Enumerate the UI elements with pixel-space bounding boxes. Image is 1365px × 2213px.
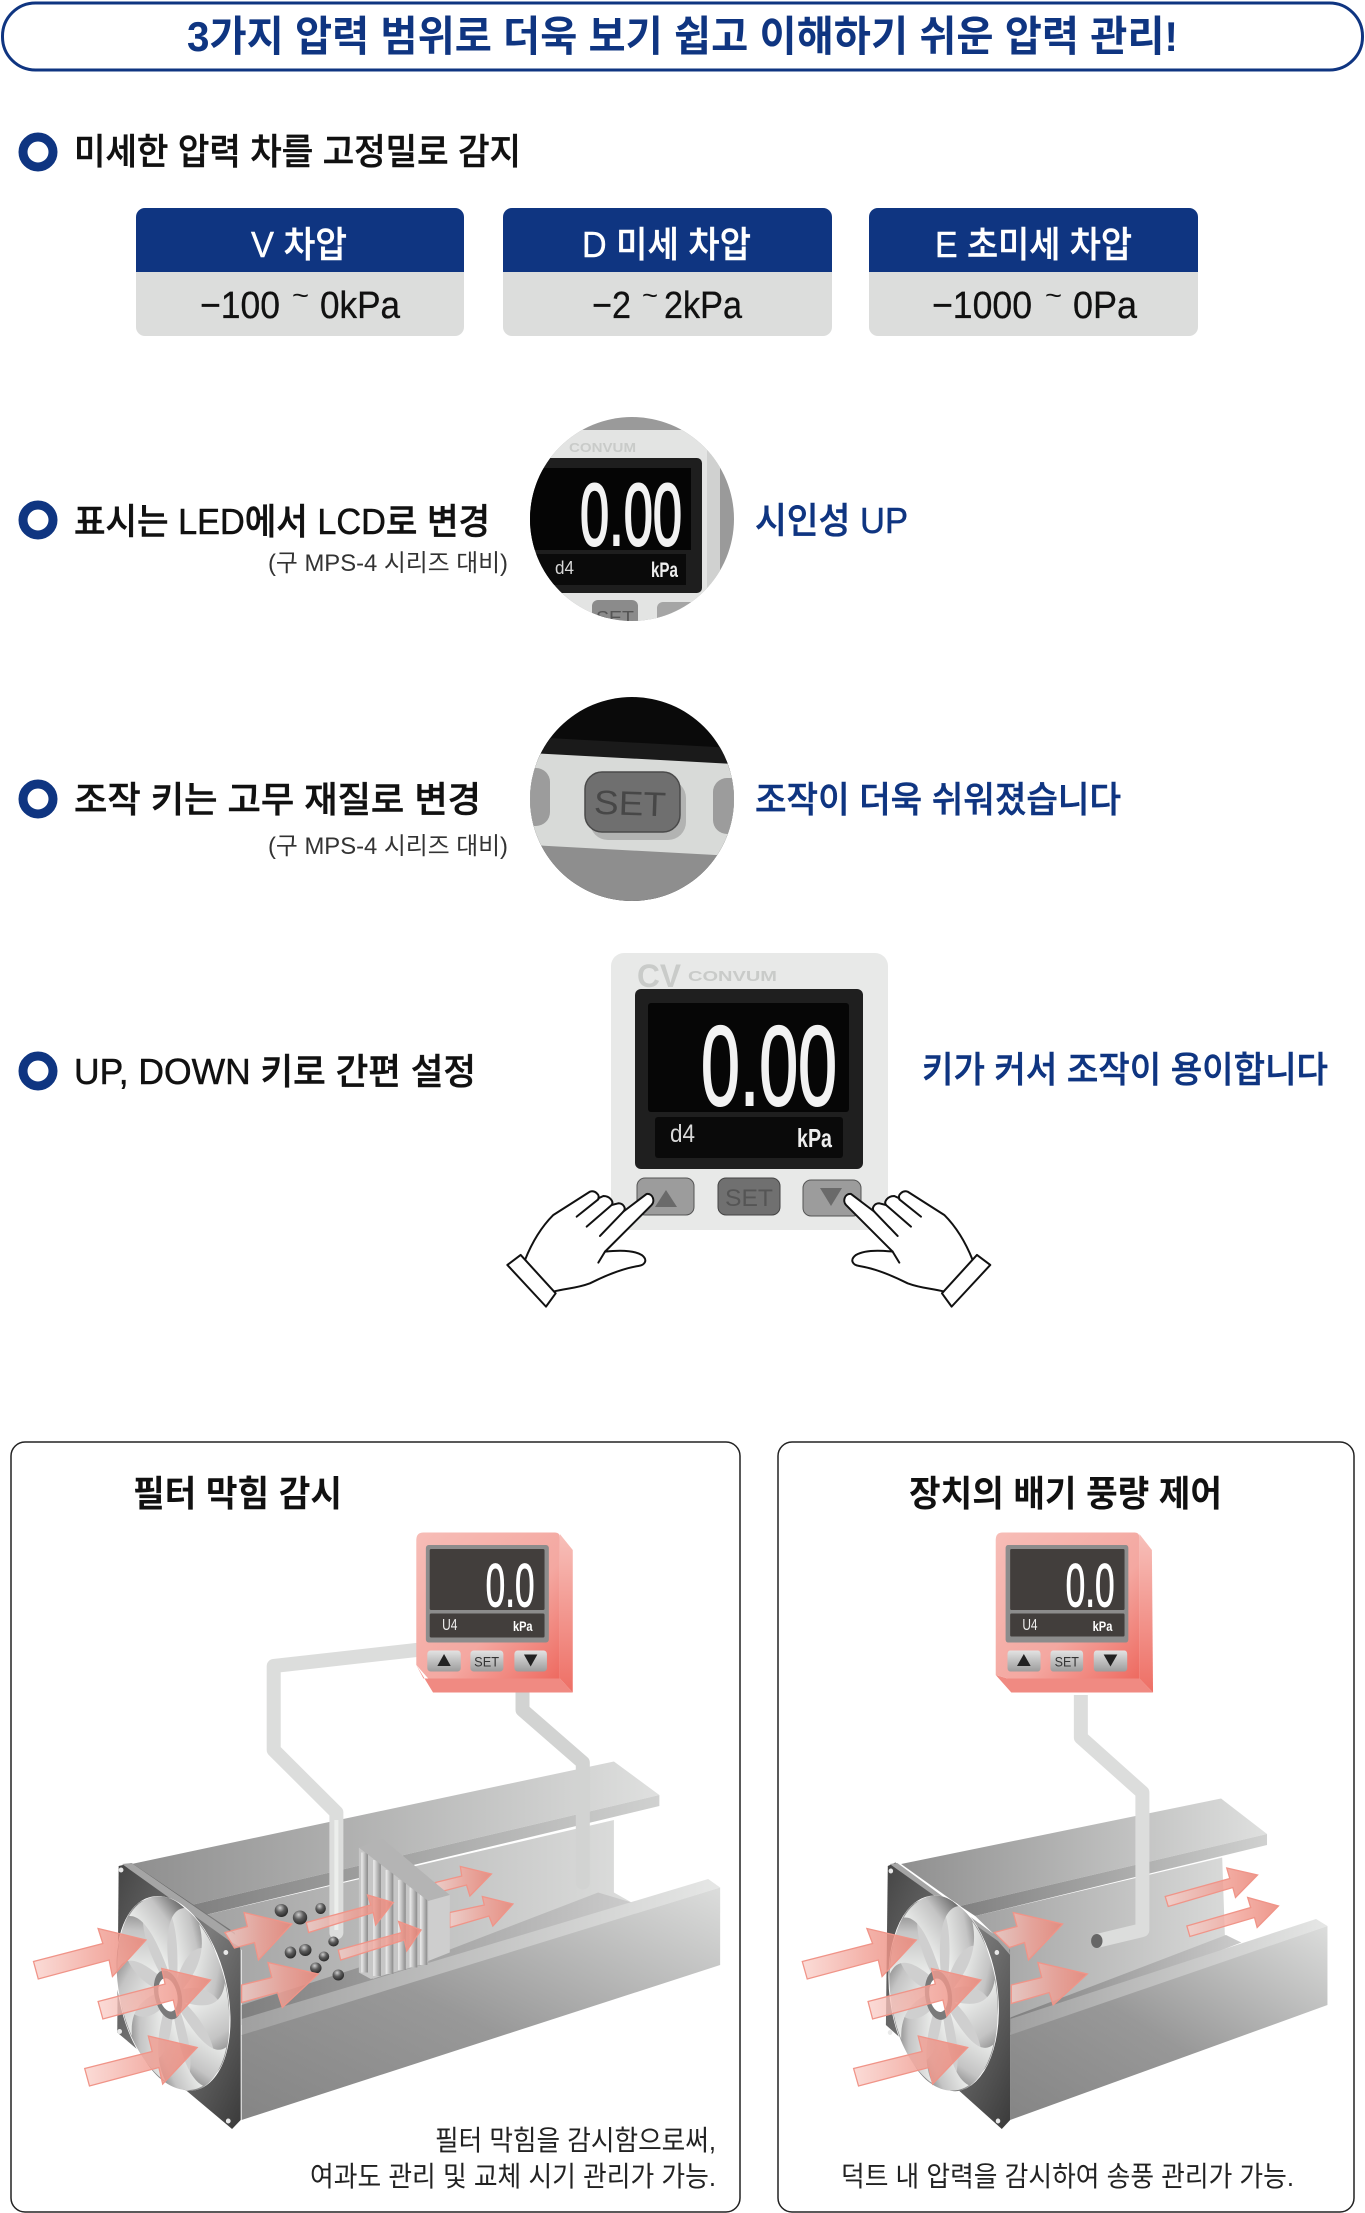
sensor device: SET	[474, 1654, 500, 1670]
display	[635, 989, 863, 1169]
heading: UP, DOWN 키로 간편 설정	[74, 1051, 476, 1092]
card: V 차압: ~	[292, 280, 309, 310]
bullet icon	[23, 784, 53, 814]
heading: 조작 키는 고무 재질로 변경	[74, 779, 481, 820]
card: E 초미세 차압: −1000	[932, 285, 1032, 327]
display: 0.00	[701, 1003, 837, 1129]
photo: LCD close-up	[530, 417, 734, 621]
display: d4	[670, 1120, 695, 1148]
panel caption	[310, 2125, 716, 2192]
sensor device: kPa	[513, 1619, 533, 1634]
card: D 미세 차압: −2	[592, 285, 631, 327]
heading: 미세한 압력 차를 고정밀로 감지	[74, 131, 521, 172]
callout: large keys: 키가 커서 조작이 용이합니다	[922, 1049, 1328, 1090]
sensor device: kPa	[1093, 1619, 1112, 1634]
sensor device	[996, 1532, 1153, 1692]
note: (구 MPS-4 시리즈 대비)	[268, 833, 508, 860]
panel: filter clog monitoring	[11, 1442, 740, 2212]
icon: right hand	[844, 1191, 990, 1307]
fan	[74, 1845, 273, 2138]
card: D 미세 차압	[503, 208, 832, 336]
key: down	[803, 1180, 861, 1216]
tube: outlet	[523, 1692, 583, 1882]
title banner	[2, 3, 1362, 70]
photo: LCD close-up: CONVUM	[569, 440, 636, 455]
tube: sensor line	[1081, 1695, 1142, 1948]
card: V 차압: V 차압	[251, 224, 347, 265]
note: (구 MPS-4 시리즈 대비)	[268, 550, 508, 577]
panel caption: 필터 막힘을 감시함으로써,	[435, 2125, 716, 2156]
tube: inlet	[274, 1650, 416, 1932]
brand logo: CV	[637, 958, 682, 994]
card: E 초미세 차압: 0Pa	[1073, 285, 1138, 327]
panel caption: 여과도 관리 및 교체 시기 관리가 가능.	[310, 2161, 716, 2192]
sensor device: 0.0	[486, 1551, 534, 1620]
section: fine pressure sensing	[23, 131, 521, 172]
card: D 미세 차압: D 미세 차압	[582, 224, 751, 265]
fan	[851, 1840, 1037, 2142]
card: V 차압	[136, 208, 464, 336]
display: kPa	[797, 1123, 832, 1153]
section: up down keys	[23, 1051, 476, 1092]
key: up	[637, 1178, 694, 1215]
sensor device	[416, 1532, 573, 1692]
card: V 차압: 0kPa	[320, 285, 401, 327]
section: rubber keys	[23, 779, 508, 860]
bullet icon	[23, 505, 53, 535]
photo: SET key close-up: SET	[593, 784, 667, 824]
section: LED to LCD	[23, 501, 508, 577]
panel: exhaust airflow control	[778, 1442, 1354, 2212]
photo: SET key close-up	[530, 697, 734, 901]
callout: easier operation: 조작이 더욱 쉬워졌습니다	[755, 779, 1121, 820]
panel heading: 필터 막힘 감시	[133, 1473, 342, 1514]
photo: LCD close-up: 0.00	[580, 465, 682, 564]
card: V 차압: −100	[200, 285, 280, 327]
arrows: air flow	[33, 1895, 421, 2086]
brand logo: CONVUM	[688, 968, 777, 985]
particles	[275, 1903, 344, 1980]
heading: 표시는 LED에서 LCD로 변경	[74, 501, 490, 542]
key: set	[718, 1178, 780, 1215]
bullet icon	[23, 137, 53, 167]
filter	[359, 1839, 450, 1979]
arrows: air flow	[802, 1868, 1278, 2086]
sensor device: U4	[442, 1617, 458, 1634]
photo: LCD close-up: d4	[555, 558, 574, 578]
card: E 초미세 차압: ~	[1045, 280, 1062, 310]
panel caption: 덕트 내 압력을 감시하여 송풍 관리가 가능.	[841, 2161, 1294, 2192]
photo: LCD close-up: SET	[596, 608, 634, 628]
illustration: duct with sensor	[802, 1532, 1327, 2142]
icon: left hand	[507, 1191, 653, 1307]
card: D 미세 차압: ~	[642, 280, 658, 310]
duct	[901, 1798, 1327, 2120]
callout: visibility: 시인성 UP	[755, 500, 908, 541]
duct	[132, 1762, 720, 2120]
bullet icon	[23, 1056, 53, 1086]
panel heading: 장치의 배기 풍량 제어	[909, 1473, 1222, 1514]
sensor device: 0.0	[1066, 1552, 1115, 1620]
title banner: 3가지 압력 범위로 더욱 보기 쉽고 이해하기 쉬운 압력 관리!	[187, 13, 1178, 60]
photo: LCD close-up: kPa	[651, 559, 678, 582]
sensor device: U4	[1022, 1616, 1038, 1635]
illustration: duct with filter and sensor	[33, 1532, 720, 2138]
brand logo	[637, 958, 777, 994]
card: E 초미세 차압	[869, 208, 1198, 336]
card: D 미세 차압: 2kPa	[664, 285, 743, 327]
device: pressure sensor with LCD	[611, 953, 888, 1230]
key: set: SET	[725, 1185, 773, 1212]
card: E 초미세 차압: E 초미세 차압	[935, 224, 1132, 265]
sensor device: SET	[1055, 1654, 1079, 1670]
arrows: outlet flow	[435, 1866, 513, 1928]
